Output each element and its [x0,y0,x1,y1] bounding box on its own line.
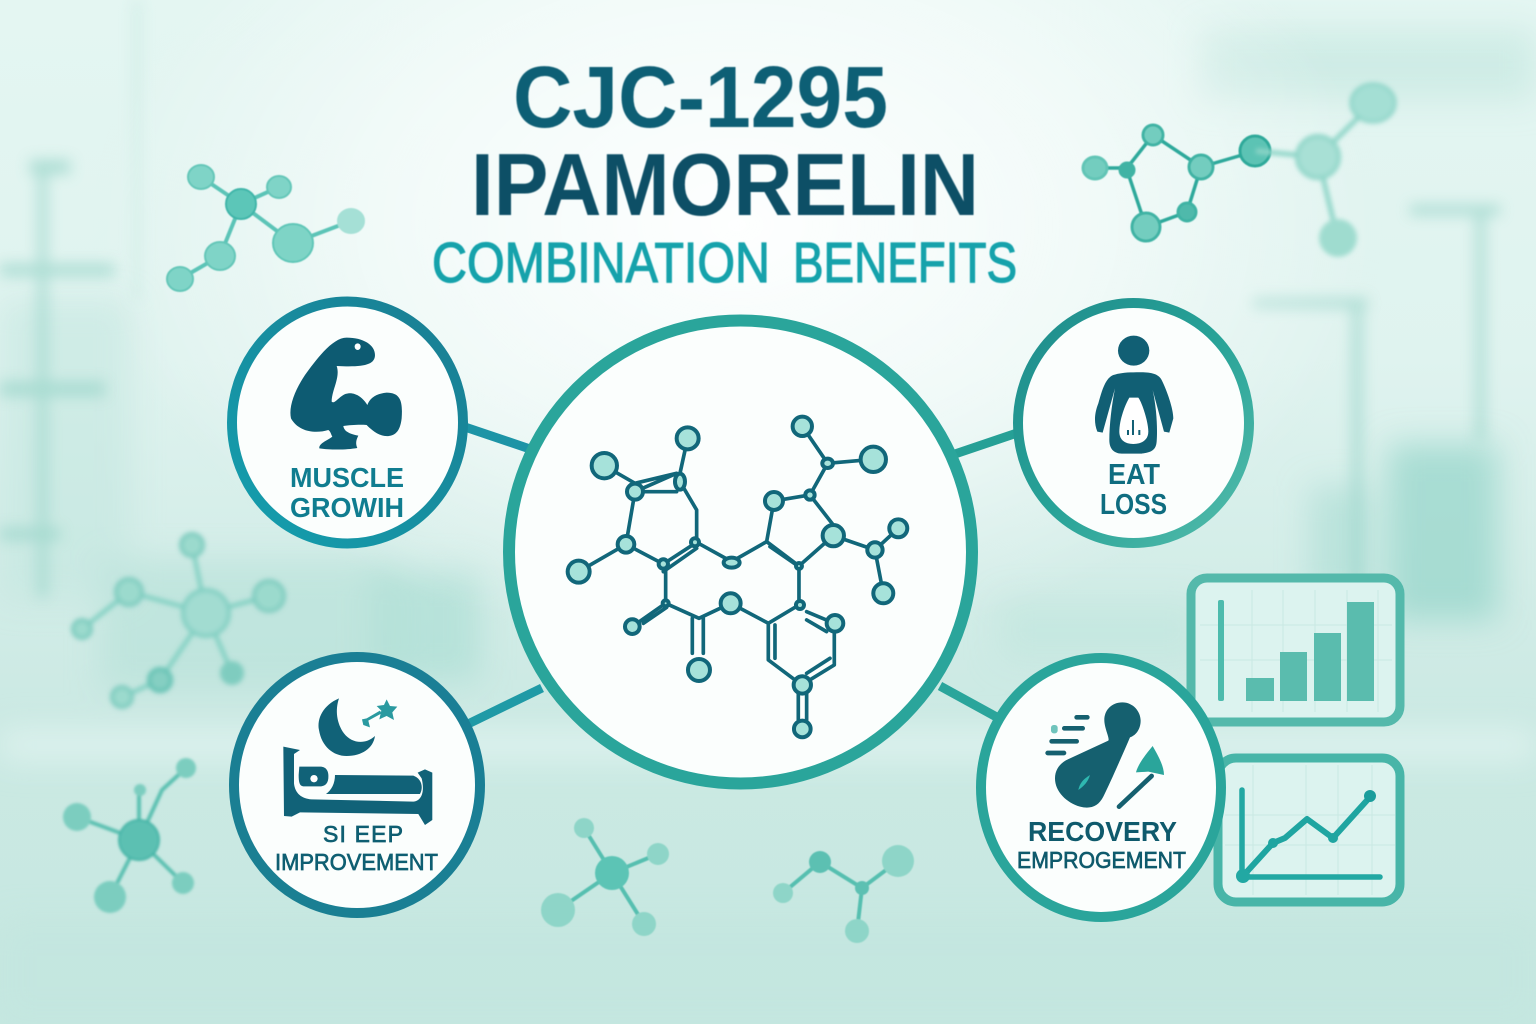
benefit: fat loss [1018,303,1249,543]
label: SI EEP [323,821,403,847]
icon: moon, star and bed [283,698,432,825]
central molecule circle [509,320,972,784]
label: GROWIH [290,492,404,523]
icon: flexed arm [290,338,402,450]
title line: IPAMORELIN: IPAMORELIN [471,135,979,234]
icon: limb with speed lines and arrow [1048,702,1164,808]
benefit: recovery improvement [981,658,1221,917]
molecule: bottom centre left [541,818,669,936]
connector: sleep improvement [468,688,542,724]
icon: person with belly [1095,336,1173,454]
label: RECOVERY [1028,816,1177,847]
label: IMPROVEMENT [275,849,438,875]
subtitle: BENEFITS [793,231,1017,295]
bar chart axis [1218,600,1224,701]
label [275,821,438,875]
label [290,462,404,523]
label: EMPROGEMENT [1017,847,1186,873]
trend line [1236,790,1376,883]
title [432,49,1017,295]
connector: recovery [940,686,1002,720]
chart: bar chart panel [1191,578,1400,722]
molecule: top left [167,165,364,291]
subtitle: COMBINATION [432,231,770,295]
label: EAT [1108,459,1160,491]
label [1017,816,1186,873]
label [1100,459,1167,521]
molecular structure [568,417,907,737]
label: MUSCLE [290,462,404,493]
label: LOSS [1100,489,1167,521]
axes [1242,790,1380,877]
connector: fat loss [952,432,1020,455]
benefit: muscle growth [232,302,463,544]
bars [1246,602,1374,701]
molecule: bottom centre right [773,845,914,943]
molecule: bottom left [63,758,196,913]
benefit: sleep improvement [234,657,480,913]
connector: muscle growth [462,426,530,449]
molecule: top right [1083,84,1395,257]
title line: CJC-1295: CJC-1295 [513,49,888,146]
subtitle [432,231,1017,295]
chart: line chart panel [1218,758,1400,902]
molecule: left middle [73,534,284,707]
